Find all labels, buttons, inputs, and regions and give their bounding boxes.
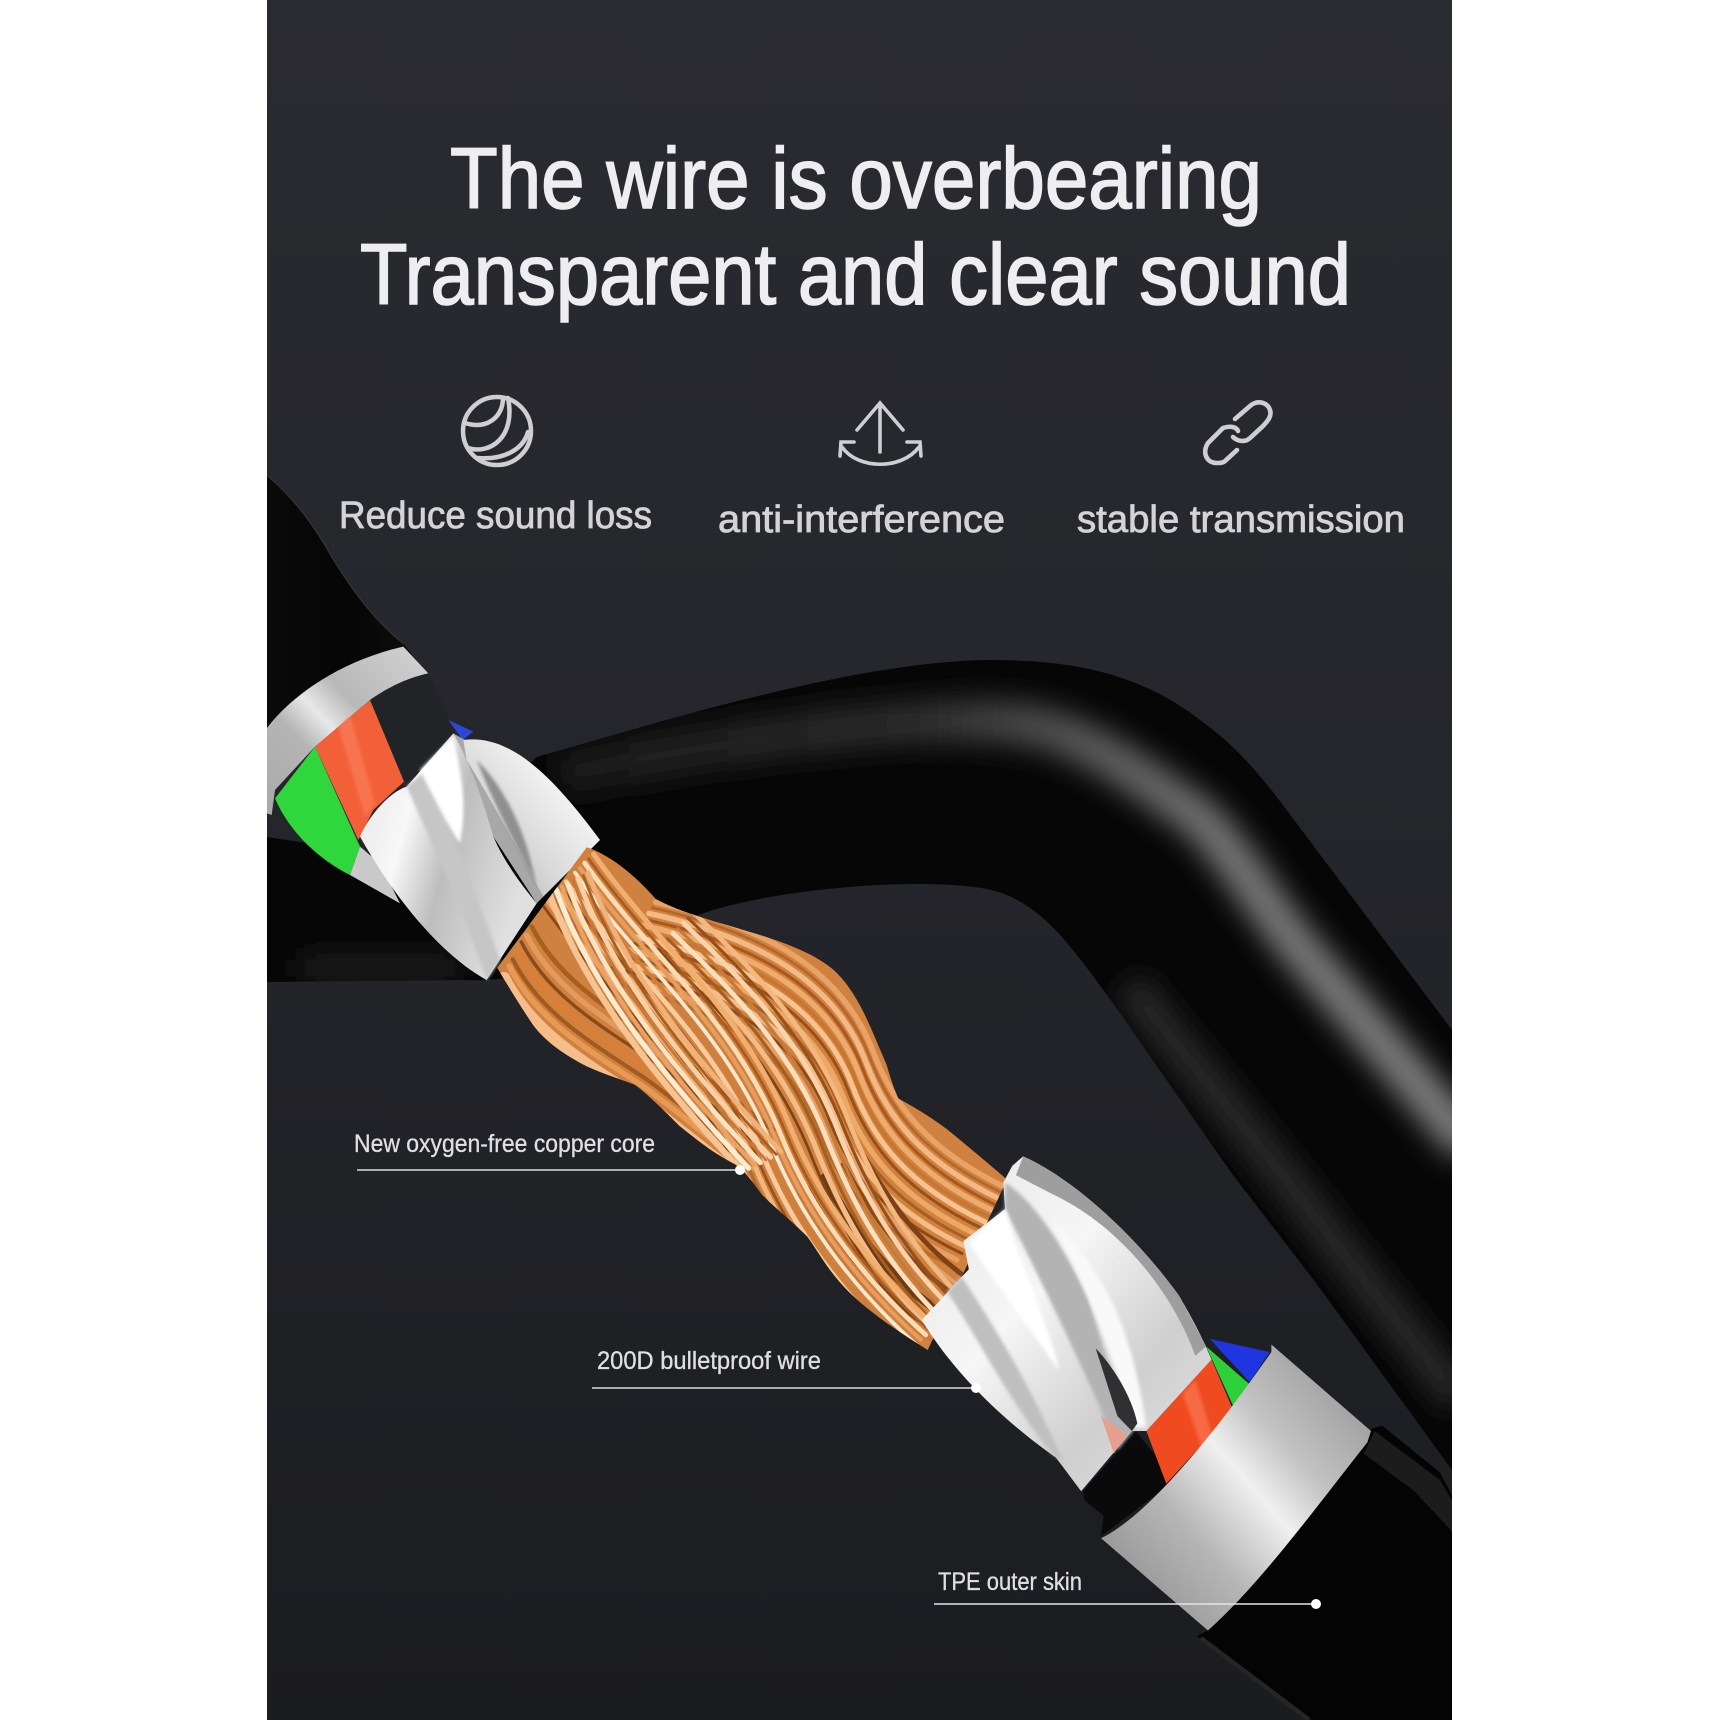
- foil shading: [1005, 1183, 1135, 1450]
- green core: [1206, 1346, 1249, 1406]
- bundle: central twist: [657, 913, 962, 1335]
- icon: chain link: [1205, 402, 1271, 463]
- bundle: bright front strands: [549, 873, 781, 1171]
- black outer jacket: [267, 476, 418, 728]
- callout: TPE outer skin: TPE outer skin: [938, 1568, 1082, 1596]
- callout: copper core: [354, 1130, 745, 1175]
- silver wedge: [350, 847, 400, 903]
- callout: bulletproof wire: 200D bulletproof wire: [597, 1347, 821, 1375]
- callout: TPE outer skin: [934, 1568, 1321, 1609]
- right foil lobe: [463, 739, 600, 897]
- callout: bulletproof wire: [592, 1347, 981, 1393]
- black inner core: [1083, 1431, 1175, 1536]
- feature labels: stable transmission: [1077, 499, 1405, 541]
- orange core: [1146, 1360, 1233, 1484]
- foil edge: [1016, 1156, 1206, 1356]
- bundle: middle twist: [543, 854, 935, 1377]
- icon: sphere: [463, 397, 531, 465]
- feature labels: Reduce sound loss: [339, 495, 652, 537]
- title: [360, 131, 1351, 323]
- orange core: [315, 700, 404, 840]
- bundle: lower right: [797, 1150, 964, 1342]
- right cable end: [922, 1156, 1460, 1720]
- bundle: lower-left strands: [504, 926, 773, 1181]
- icon: arrow and arc: [840, 403, 921, 464]
- silver ring: [267, 647, 428, 815]
- infographic canvas: [267, 0, 1452, 1720]
- title: Transparent and clear sound: [360, 227, 1351, 323]
- dark background panel: [267, 0, 1452, 1720]
- foil backing: [453, 733, 543, 903]
- feature labels: [339, 495, 1405, 541]
- green core: [275, 747, 360, 875]
- black inner core: [370, 674, 428, 704]
- left foil lobe: [360, 733, 537, 980]
- foil body: [922, 1156, 1212, 1491]
- blue core: [448, 720, 473, 740]
- blue core: [1210, 1339, 1270, 1382]
- copper core: [497, 847, 1006, 1350]
- background cable bend: [267, 660, 1470, 1470]
- bundle: top lobe strands: [601, 902, 1007, 1266]
- title: The wire is overbearing: [450, 131, 1262, 227]
- callout: copper core: New oxygen-free copper core: [354, 1130, 655, 1158]
- left cable end: [267, 475, 600, 980]
- black outer jacket: [1197, 1425, 1460, 1720]
- silver ring: [1101, 1344, 1371, 1630]
- feature labels: anti-interference: [718, 499, 1005, 541]
